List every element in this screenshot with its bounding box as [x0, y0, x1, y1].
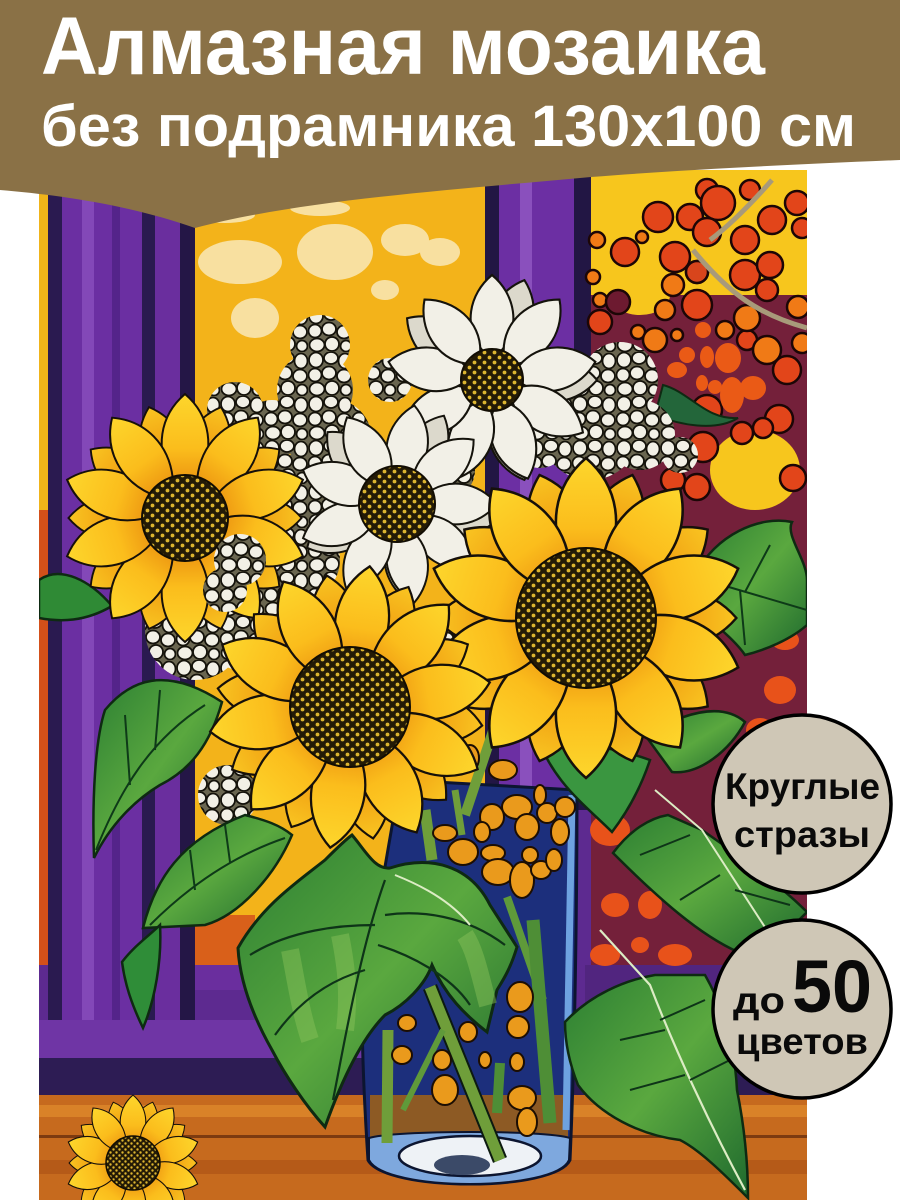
yellow sky patches between berries — [591, 170, 807, 510]
orange berries — [392, 745, 575, 1136]
leaf: big centre — [238, 835, 517, 1127]
branch — [693, 180, 807, 328]
leaf: left lower — [122, 815, 292, 1028]
title: Алмазная мозаика — [41, 1, 766, 92]
glass vase — [362, 780, 577, 1184]
stems in the vase — [387, 725, 550, 1160]
badge: up to 50 colours: до — [733, 980, 785, 1021]
badge: up to 50 colours: цветов — [736, 1021, 868, 1062]
autumn berry tree — [586, 179, 812, 500]
white flower clusters — [145, 315, 698, 688]
badge: round rhinestones: стразы — [734, 814, 870, 855]
daisy: middle — [302, 404, 490, 604]
leaf: left upper — [93, 680, 222, 858]
badge: round rhinestones: Круглые — [725, 766, 880, 807]
sunflower: left — [60, 394, 310, 642]
sunflower: small on the table — [64, 1095, 202, 1200]
header banner — [0, 0, 900, 228]
small leaf behind left sunflower — [39, 574, 112, 620]
leaf: bottom right — [565, 930, 748, 1198]
cream clouds in the yellow window — [195, 200, 460, 338]
sunflower: centre — [208, 564, 492, 850]
sunflower: right large — [425, 458, 747, 778]
white cluster low left — [198, 765, 258, 825]
subtitle: без подрамника 130х100 см — [41, 94, 856, 159]
badge: round rhinestones — [713, 715, 891, 893]
leaf: under right sunflower — [645, 711, 745, 772]
orange blobs in the lower right window — [590, 630, 802, 966]
leaf: green under right sunflower — [546, 749, 652, 834]
painting: sunflowers in a vase — [39, 170, 812, 1200]
badge: up to 50 colours — [713, 920, 891, 1098]
leaf: upper right — [695, 521, 807, 655]
badge: up to 50 colours: 50 — [792, 945, 872, 1028]
white cluster overlapping left sunflower — [203, 534, 266, 612]
window scene background — [39, 170, 807, 1200]
leaf: right middle — [613, 790, 807, 952]
green leaf in the tree — [655, 385, 738, 426]
daisy: top — [385, 274, 599, 486]
